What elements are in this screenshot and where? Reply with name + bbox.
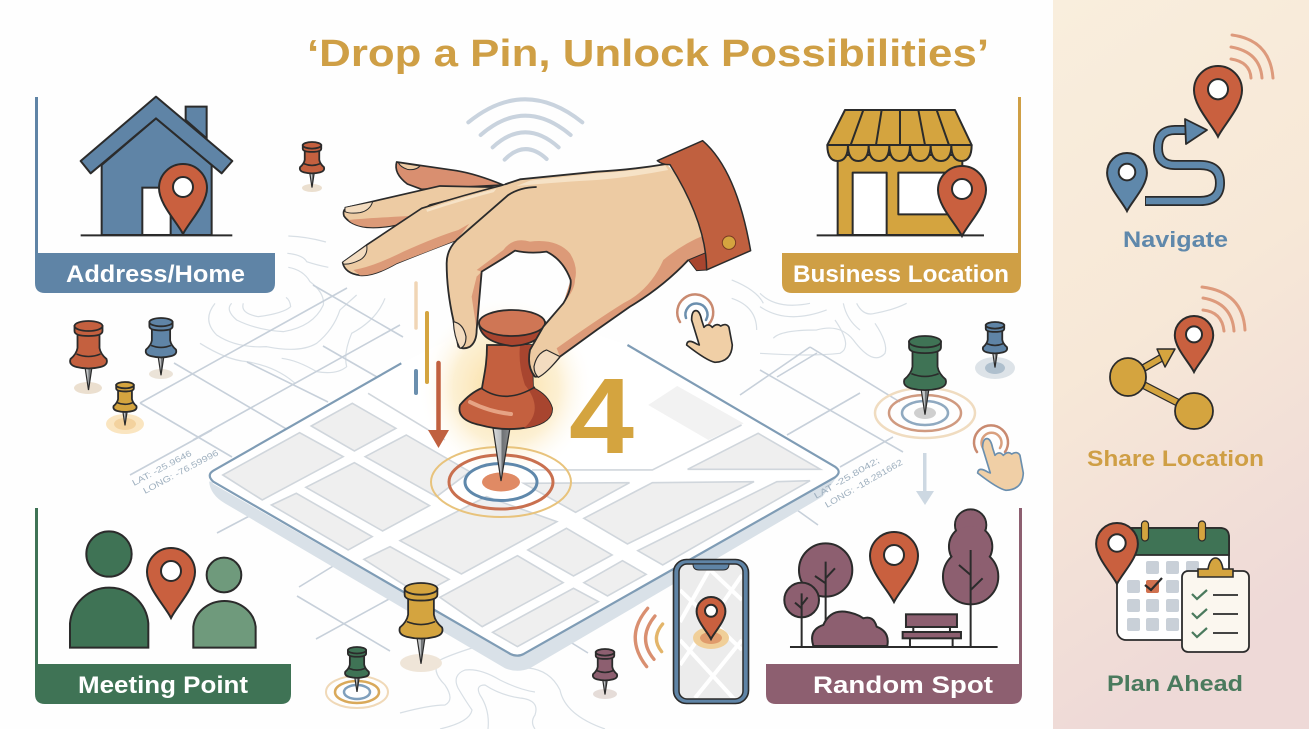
scattered pin: green large: [875, 336, 975, 438]
hand holding pin: [343, 141, 751, 377]
label: address home: Address/Home: [66, 261, 245, 288]
title: ‘Drop a Pin, Unlock Possibilities’: [307, 33, 989, 75]
topographic contour lines: upper left: [200, 236, 385, 383]
label: navigate: Navigate: [1123, 227, 1228, 252]
glow around main pin: [418, 296, 594, 480]
icon: signal arcs: [1231, 35, 1273, 78]
phone: [674, 560, 748, 704]
panel: side actions: [1053, 0, 1309, 729]
cuff: [657, 141, 751, 270]
icon: phone pin: [697, 597, 725, 639]
palm and thumb: [447, 164, 708, 377]
topographic contour lines: bottom: [400, 648, 605, 729]
label: plan ahead: Plan Ahead: [1107, 671, 1243, 696]
board shadow: [209, 477, 837, 671]
finger nail: [453, 322, 466, 348]
number 4: 4: [569, 355, 634, 476]
coordinates right: LAT -25.8042;: [812, 455, 881, 501]
icon: two people: [70, 531, 256, 648]
main push pin: [459, 310, 552, 481]
palm shading: [477, 240, 576, 303]
label: random spot: Random Spot: [813, 672, 993, 699]
panel: random spot: [766, 508, 1022, 704]
icon: calendar: [1117, 521, 1229, 640]
scattered pin: blue right: [975, 322, 1015, 379]
coordinates left: [130, 447, 220, 496]
under cuff: [688, 252, 708, 271]
board edge: [210, 345, 839, 656]
motion lines: [416, 283, 427, 393]
cuff button: [722, 236, 736, 249]
scattered pin: plum small: [593, 649, 617, 699]
board surface: [208, 307, 839, 656]
back finger: [396, 162, 503, 189]
icon: share pin: [1175, 316, 1213, 372]
icon: plan pin: [1096, 523, 1138, 584]
scattered pin: red large: [70, 321, 107, 394]
label: meeting point: Meeting Point: [78, 672, 248, 699]
phone signal arcs: [635, 608, 663, 667]
icon: meeting pin: [147, 548, 195, 618]
icon: park pin: [870, 532, 918, 602]
target rings: [431, 447, 571, 517]
city blocks: [223, 386, 820, 647]
icon: house with pin: [81, 97, 232, 235]
label: business location: Business Location: [793, 261, 1009, 288]
coordinates left: LAT: -25.9646: [130, 448, 194, 488]
icon: destination pin: [1194, 66, 1242, 137]
scattered pin: green small: [326, 647, 388, 708]
navigate block: [1107, 35, 1273, 252]
icon: shop: [817, 110, 984, 235]
icon: start pin: [1107, 153, 1147, 211]
icon: share nodes: [1110, 349, 1213, 429]
coordinates left: LONG: -76.59996: [141, 447, 220, 496]
tap icon: top: [677, 294, 732, 362]
icon: house pin: [159, 164, 207, 234]
scattered pin: gold bottom: [399, 583, 443, 672]
share block: [1087, 287, 1264, 471]
scattered pin: blue: [146, 318, 176, 379]
icon: route: [1145, 119, 1220, 201]
red drop arrow: [428, 363, 449, 448]
coordinates right: LONG: -18.281662: [823, 457, 904, 510]
index finger: [343, 183, 537, 275]
scattered pin: red small: [300, 142, 324, 192]
icon: shop pin: [938, 166, 986, 236]
icon: park: [784, 509, 998, 647]
plan block: [1096, 521, 1249, 696]
label: share location: Share Location: [1087, 446, 1264, 471]
panel: meeting point: [35, 508, 291, 704]
street grid lines: [130, 285, 903, 653]
icon: clipboard: [1182, 558, 1249, 652]
wifi signal above hand: [468, 99, 582, 160]
hand outline: [447, 164, 688, 377]
topographic contour lines: upper right: [732, 280, 907, 358]
thumb nail: [534, 350, 560, 377]
map board: [208, 307, 839, 671]
scattered pin: gold small: [106, 382, 144, 434]
panel: business location: [782, 97, 1021, 293]
middle finger: [343, 186, 500, 227]
small down arrow: [916, 453, 934, 505]
coordinates right: [812, 455, 904, 510]
tap icon: right: [974, 425, 1023, 490]
icon: signal arcs: [1202, 287, 1245, 331]
panel: address home: [35, 97, 275, 293]
